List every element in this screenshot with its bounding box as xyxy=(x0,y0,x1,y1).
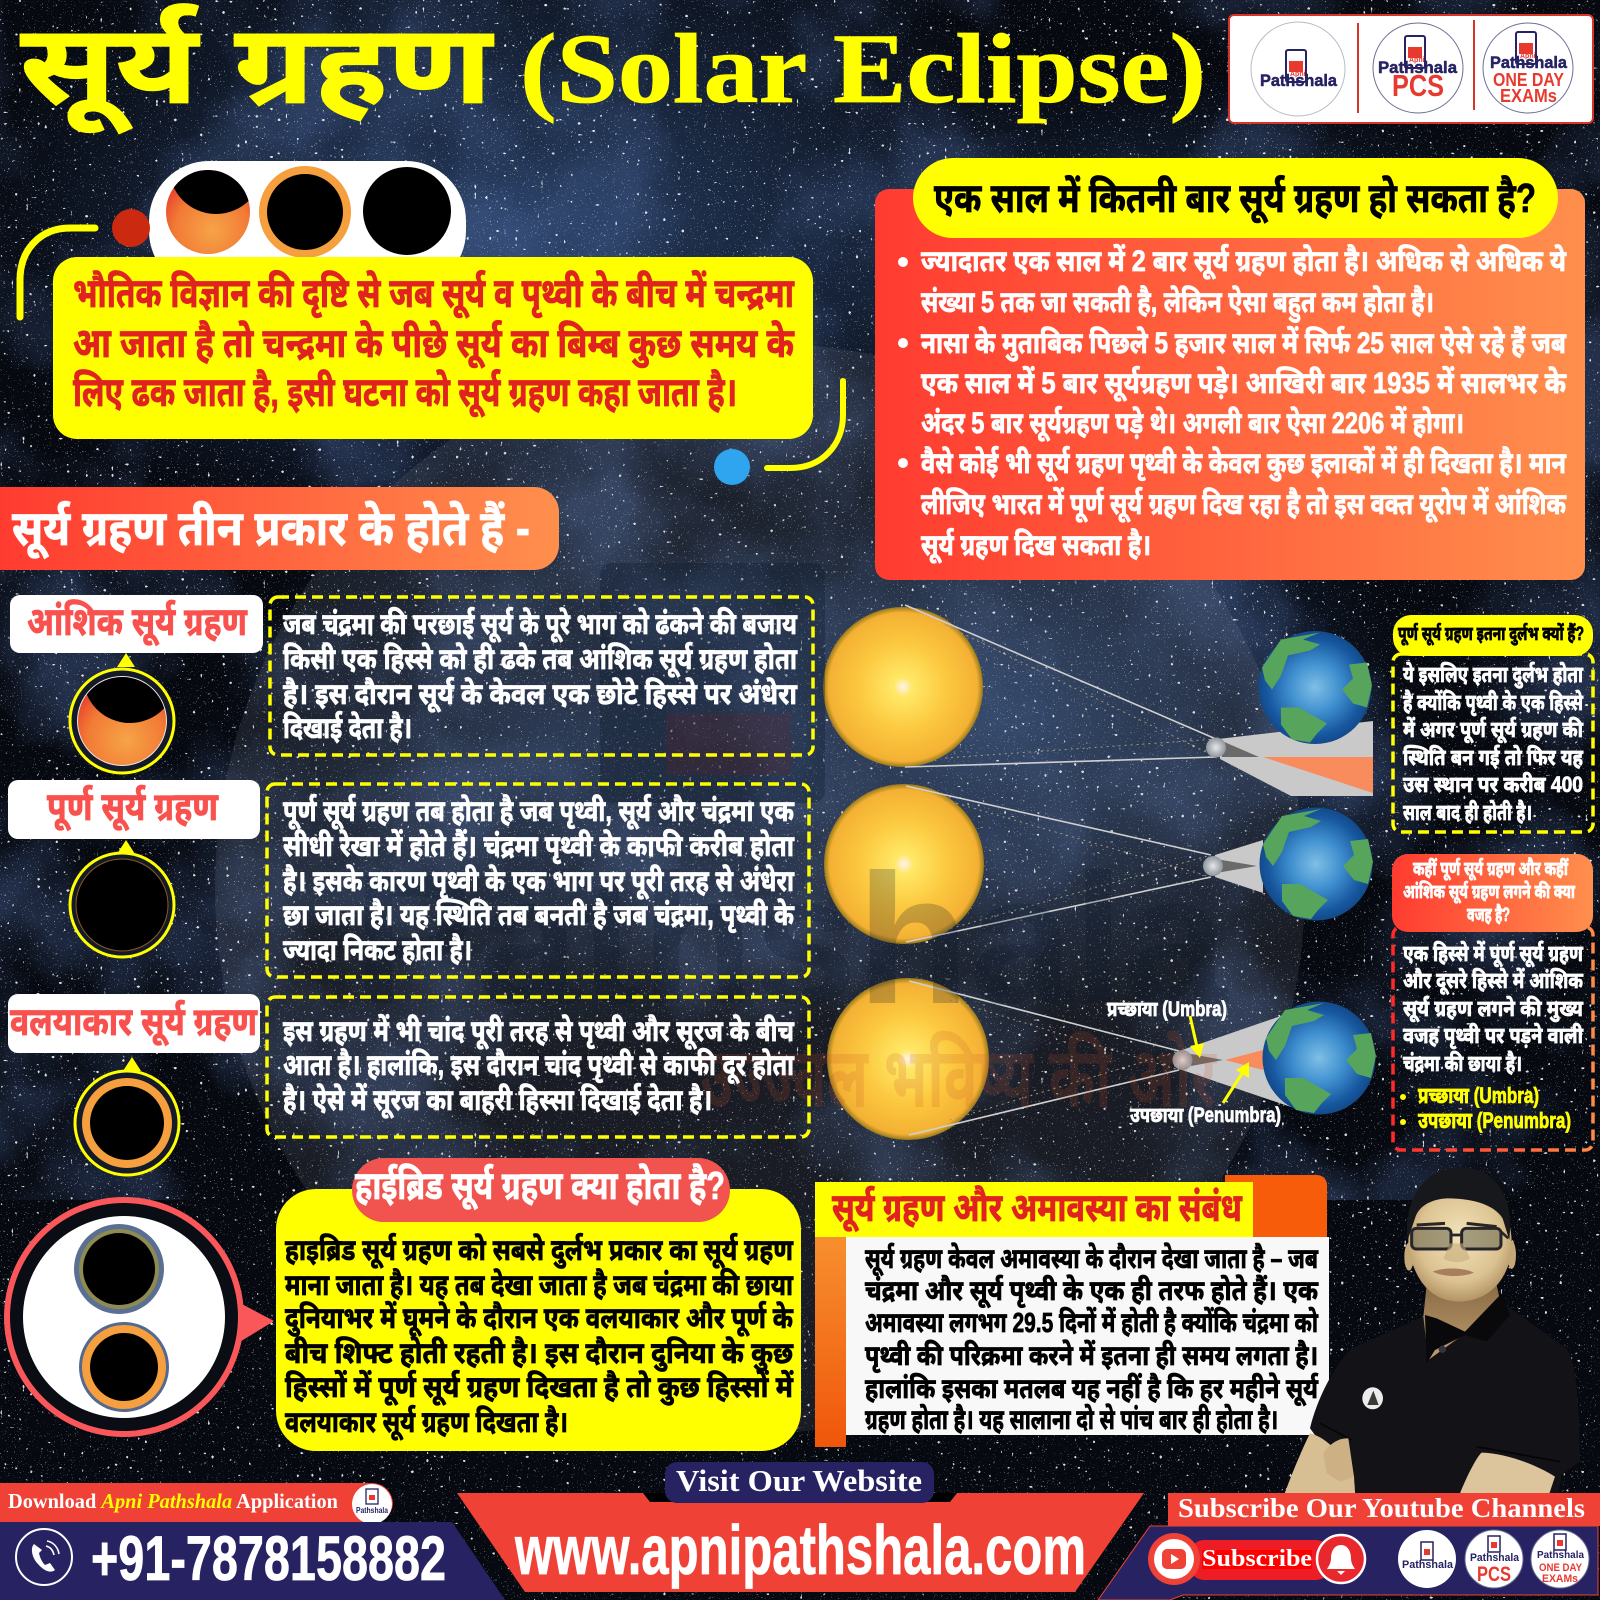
logo: Pathshala PCS xyxy=(1373,23,1463,113)
description: छा जाता है। यह स्थिति तब बनती है जब चंद्रमा, पृथ्वी के xyxy=(283,897,795,934)
watermark lettering: उज्ज्वल भविष्य की ओर xyxy=(700,1030,1217,1126)
label xyxy=(8,994,260,1053)
label: पूर्ण सूर्य ग्रहण xyxy=(47,785,219,831)
website url: www.apnipathshala.com xyxy=(514,1511,1086,1589)
description xyxy=(267,997,809,1137)
logo: Pathshala One Day Exams: Pathshala xyxy=(1490,53,1568,72)
footer: app download and phone xyxy=(0,1483,505,1600)
logo: Pathshala One Day Exams: Apni xyxy=(1520,53,1536,60)
definition panel xyxy=(53,257,813,439)
phone number: +91-7878158882 xyxy=(91,1524,446,1594)
description: जब चंद्रमा की परछाई सूर्य के पूरे भाग को ढंकने की बजाय xyxy=(283,606,798,643)
description xyxy=(267,784,809,977)
icon: annular eclipse xyxy=(259,166,351,258)
diagram row 2: total xyxy=(824,784,1373,944)
eclipse geometry diagram xyxy=(823,605,1376,1140)
arrow: penumbra xyxy=(1223,1062,1249,1103)
description: है। इस दौरान सूर्य के केवल एक छोटे हिस्से पर अंधेरा xyxy=(283,676,798,713)
heading pill: हाईब्रिड सूर्य ग्रहण क्या होता है? xyxy=(355,1164,725,1210)
badge on shirt xyxy=(1362,1387,1383,1409)
bullet list: संख्या 5 तक जा सकती है, लेकिन ऐसा बहुत कम होता है। xyxy=(921,284,1434,323)
description: ज्यादा निकट होता है। xyxy=(283,932,472,967)
definition panel: आ जाता है तो चन्द्रमा के पीछे सूर्य का बिम्ब कुछ समय के xyxy=(73,319,795,369)
logo: Pathshala PCS: PCS xyxy=(1392,68,1444,103)
panel: hybrid eclipse: हिस्सों में पूर्ण सूर्य ग्रहण दिखता है तो कुछ हिस्सों में xyxy=(285,1369,794,1406)
description: सीधी रेखा में होते हैं। चंद्रमा पृथ्वी के काफी करीब होता xyxy=(283,828,795,865)
description: दिखाई देता है। xyxy=(283,710,412,745)
channel logos xyxy=(1398,1530,1589,1588)
icon: total eclipse ring xyxy=(70,840,174,957)
phone band xyxy=(0,1522,505,1600)
title: (Solar Eclipse) xyxy=(520,13,1206,124)
description xyxy=(270,597,813,755)
description: इस ग्रहण में भी चांद पूरी तरह से पृथ्वी और सूरज के बीच xyxy=(283,1013,795,1050)
heading band xyxy=(815,1182,1253,1237)
icon: hybrid eclipse xyxy=(7,1200,274,1434)
channel logos: Pathshala xyxy=(1402,1559,1454,1571)
section banner: three types xyxy=(0,487,559,570)
logos panel xyxy=(1229,15,1593,123)
footer: youtube channels xyxy=(1098,1493,1600,1600)
eclipse phases pill xyxy=(149,161,466,257)
logo: Pathshala PCS: Apni xyxy=(1409,57,1425,64)
icon: partial eclipse xyxy=(166,170,250,254)
panel: eclipse and new moon: हालांकि इसका मतलब यह नहीं है कि हर महीने सूर्य xyxy=(865,1371,1319,1406)
side heading xyxy=(1393,615,1593,656)
panel: hybrid eclipse: दुनियाभर में घूमने के दौरान एक वलयाकार और पूर्ण के xyxy=(285,1300,794,1337)
channel logos: Pathshala xyxy=(1537,1549,1584,1561)
description: किसी एक हिस्से को ही ढके तब आंशिक सूर्य ग्रहण होता xyxy=(283,641,798,678)
definition panel: लिए ढक जाता है, इसी घटना को सूर्य ग्रहण कहा जाता है। xyxy=(73,368,737,418)
panel: eclipse and new moon xyxy=(815,1175,1329,1447)
panel: eclipse and new moon: चंद्रमा और सूर्य पृथ्वी के एक ही तरफ होते हैं। एक xyxy=(865,1273,1319,1308)
channel logos: Pathshala xyxy=(1470,1552,1520,1564)
orange tab xyxy=(1225,1175,1327,1242)
side panel: why total in some places and partial elsewhere: प्रच्छाया (Umbra) xyxy=(1418,1083,1539,1108)
panel: hybrid eclipse: माना जाता है। यह तब देखा जाता है जब चंद्रमा की छाया xyxy=(285,1267,794,1302)
subscribe header: Subscribe Our Youtube Channels xyxy=(1178,1493,1585,1523)
title: सूर्य ग्रहण xyxy=(20,3,494,135)
logo: Apni Pathshala xyxy=(1251,22,1345,116)
label: umbra: प्रच्छाया (Umbra) xyxy=(1107,998,1227,1021)
watermark lettering: Pathshala xyxy=(353,837,1229,1043)
bullet list: सूर्य ग्रहण दिख सकता है। xyxy=(921,527,1151,564)
panel: hybrid eclipse xyxy=(276,1158,801,1451)
panel: eclipse and new moon: सूर्य ग्रहण केवल अमावस्या के दौरान देखा जाता है – जब xyxy=(865,1241,1318,1276)
side panel: why total eclipse is rare xyxy=(1393,615,1593,832)
channel logos: ONE DAY xyxy=(1539,1562,1583,1574)
accent blue dot and hook xyxy=(714,381,843,485)
diagram row 3: annular with labels xyxy=(827,978,1376,1140)
icon: annular eclipse ring xyxy=(75,1057,179,1175)
download band xyxy=(0,1483,393,1523)
icon: partial eclipse ring xyxy=(68,653,176,774)
app logo xyxy=(352,1484,392,1524)
label xyxy=(8,780,260,839)
app logo: Pathshala xyxy=(356,1506,388,1515)
side heading: वजह है? xyxy=(1467,903,1510,926)
diagram row 1: partial xyxy=(823,605,1373,796)
panel: hybrid eclipse: वलयाकार सूर्य ग्रहण दिखता है। xyxy=(285,1404,568,1441)
logo: Apni Pathshala: Pathshala xyxy=(1260,71,1338,90)
visit website pill: Visit Our Website xyxy=(676,1463,922,1498)
label xyxy=(10,595,263,653)
logo: Pathshala One Day Exams: EXAMs xyxy=(1500,86,1557,106)
subscribe button xyxy=(1148,1533,1365,1585)
type: annular eclipse xyxy=(8,994,809,1175)
footer: website xyxy=(457,1462,1144,1592)
type: total eclipse xyxy=(8,780,809,977)
description: है। ऐसे में सूरज का बाहरी हिस्सा दिखाई देता है। xyxy=(283,1082,712,1119)
logo: Apni Pathshala: Apni xyxy=(1290,71,1306,78)
type: partial eclipse xyxy=(10,595,813,773)
arrow: umbra xyxy=(1190,1016,1204,1058)
side heading xyxy=(1392,854,1593,932)
logo: Pathshala One Day Exams xyxy=(1483,23,1573,113)
side panel: why total eclipse is rare: साल बाद ही होती है। xyxy=(1403,799,1532,825)
diagram labels and arrows xyxy=(1107,998,1281,1127)
description: पूर्ण सूर्य ग्रहण तब होता है जब पृथ्वी, सूर्य और चंद्रमा एक xyxy=(283,793,795,830)
icon: phone xyxy=(16,1529,72,1585)
heading pill xyxy=(913,158,1558,238)
description: है। इसके कारण पृथ्वी के एक भाग पर पूरी तरह से अंधेरा xyxy=(283,863,795,900)
logo: Pathshala PCS: Pathshala xyxy=(1378,58,1458,77)
presenter photo xyxy=(1280,1167,1580,1507)
label: वलयाकार सूर्य ग्रहण xyxy=(10,1000,258,1046)
side panel: why total in some places and partial elsewhere xyxy=(1392,854,1593,1150)
panel: eclipse and new moon: ग्रहण होता है। यह सालाना दो से पांच बार ही होता है। xyxy=(865,1402,1278,1435)
channel logos: PCS xyxy=(1477,1563,1511,1586)
channel logos: EXAMs xyxy=(1542,1573,1578,1585)
watermark lettering xyxy=(353,563,1229,1126)
title xyxy=(20,3,1206,135)
section banner: three types: सूर्य ग्रहण तीन प्रकार के होते हैं - xyxy=(12,500,530,560)
bullet list xyxy=(898,243,1567,564)
label: आंशिक सूर्य ग्रहण xyxy=(27,600,248,646)
heading pill xyxy=(352,1158,730,1222)
icon: total eclipse xyxy=(363,167,451,255)
panel: hybrid eclipse: बीच शिफ्ट होती रहती है। इस दौरान दुनिया के कुछ xyxy=(285,1335,794,1372)
description: आता है। हालांकि, इस दौरान चांद पृथ्वी से काफी दूर होता xyxy=(283,1047,795,1084)
panel: eclipse and new moon: पृथ्वी की परिक्रमा करने में इतना ही समय लगता है। xyxy=(865,1338,1318,1373)
heading band: सूर्य ग्रहण और अमावस्या का संबंध xyxy=(832,1186,1243,1232)
definition panel: भौतिक विज्ञान की दृष्टि से जब सूर्य व पृथ्वी के बीच में चन्द्रमा xyxy=(73,269,795,319)
download band: Download Apni Pathshala Application xyxy=(8,1489,338,1513)
panel: how many eclipses per year xyxy=(875,158,1585,580)
logo: Pathshala One Day Exams: ONE DAY xyxy=(1493,70,1564,90)
bullet list: अंदर 5 बार सूर्यग्रहण पड़े थे। अगली बार ऐसा 2206 में होगा। xyxy=(921,405,1464,442)
label: penumbra: उपछाया (Penumbra) xyxy=(1130,1104,1281,1127)
panel: eclipse and new moon: अमावस्या लगभग 29.5 दिनों में होती है क्योंकि चंद्रमा को xyxy=(865,1306,1319,1338)
subscribe button: Subscribe xyxy=(1202,1546,1312,1572)
watermark circle xyxy=(215,343,1305,1433)
accent red dot and hook xyxy=(20,209,150,317)
side panel: why total in some places and partial elsewhere: चंद्रमा की छाया है। xyxy=(1403,1050,1522,1076)
panel: hybrid eclipse: हाइब्रिड सूर्य ग्रहण को सबसे दुर्लभ प्रकार का सूर्य ग्रहण xyxy=(285,1232,794,1269)
